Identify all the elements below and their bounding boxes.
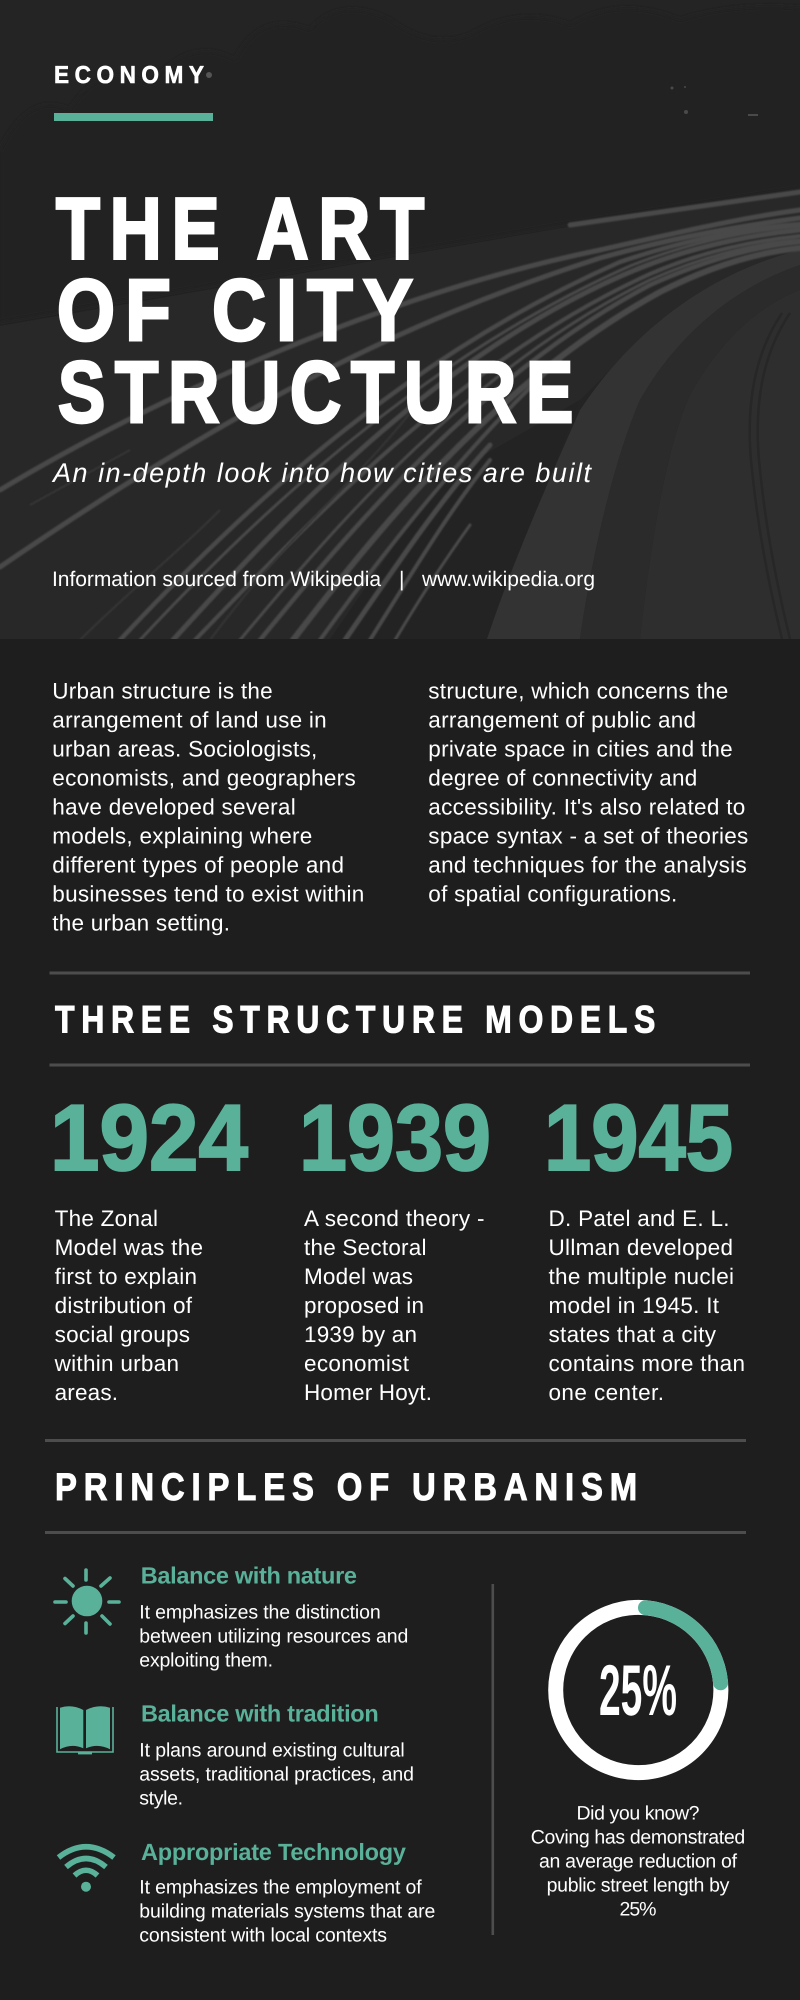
principle: appropriate technology: Appropriate Technology [141, 1839, 406, 1865]
source line: www.wikipedia.org [421, 568, 595, 591]
model 1924: within urban [54, 1351, 179, 1376]
model 1939: Homer Hoyt. [304, 1380, 432, 1405]
callout: did you know: 25% [620, 1898, 656, 1920]
model 1945: one center. [548, 1380, 664, 1405]
intro text: right column: arrangement of public and [428, 707, 696, 732]
model 1924: areas. [55, 1380, 118, 1405]
model 1945: the multiple nuclei [548, 1264, 734, 1289]
model 1945: Ullman developed [548, 1235, 733, 1260]
source line: | [399, 568, 404, 591]
model 1939: Model was [304, 1264, 413, 1289]
intro text: right column: space syntax - a set of theories [428, 823, 748, 848]
model 1939: 1939 [299, 1085, 491, 1190]
intro text: left column: urban areas. Sociologists, [52, 736, 317, 761]
intro text: right column: of spatial configurations. [428, 881, 677, 906]
heading: principles of urbanism: PRINCIPLES OF URBANISM [55, 1466, 644, 1509]
model 1939: proposed in [304, 1293, 424, 1318]
intro text: left column: economists, and geographers [52, 765, 356, 790]
intro text: right column [428, 678, 748, 906]
intro text: right column: degree of connectivity and [428, 765, 697, 790]
intro text: left column: the urban setting. [52, 910, 230, 935]
stat: 25 percent donut chart: 25% [599, 1651, 677, 1731]
model 1924: social groups [55, 1322, 190, 1347]
principle: balance with nature: exploiting them. [139, 1649, 273, 1671]
intro text: left column: models, explaining where [52, 823, 312, 848]
panel: hero header [0, 66, 800, 639]
model 1924: distribution of [55, 1293, 193, 1318]
icon: wifi [58, 1847, 114, 1892]
source line: Information sourced from Wikipedia [52, 568, 381, 591]
stat: 25 percent donut chart [556, 1607, 721, 1773]
model 1939 [299, 1085, 491, 1405]
hero background: night highway photo [0, 72, 800, 639]
model 1939: the Sectoral [304, 1235, 426, 1260]
source line [52, 568, 595, 591]
callout: did you know: an average reduction of [539, 1850, 738, 1872]
model 1924: 1924 [50, 1085, 248, 1190]
model 1945 [544, 1085, 745, 1405]
principle: balance with tradition [57, 1701, 414, 1810]
principle: balance with nature: between utilizing resources and [139, 1625, 408, 1647]
callout: did you know [531, 1802, 745, 1920]
intro text: right column: structure, which concerns the [428, 678, 728, 703]
model 1939: 1939 by an [304, 1322, 417, 1347]
principle: appropriate technology: consistent with local contexts [139, 1924, 387, 1946]
intro text: right column: accessibility. It's also related to [428, 794, 745, 819]
model 1924: The Zonal [55, 1206, 158, 1231]
model 1924 [50, 1085, 248, 1405]
model 1945: 1945 [544, 1085, 733, 1190]
model 1924: first to explain [55, 1264, 197, 1289]
section: three structure models [50, 972, 750, 1405]
model 1939: economist [304, 1351, 410, 1376]
intro text: left column: different types of people and [52, 852, 344, 877]
intro text: left column: have developed several [52, 794, 296, 819]
principle: balance with tradition: style. [139, 1788, 183, 1810]
callout: did you know: public street length by [547, 1874, 730, 1896]
title: STRUCTURE [58, 344, 583, 441]
model 1945: model in 1945. It [548, 1293, 720, 1318]
model 1945: D. Patel and E. L. [548, 1206, 730, 1231]
title: OF CITY [57, 262, 423, 359]
intro text: left column: Urban structure is the [52, 678, 273, 703]
icon: sun [55, 1570, 119, 1633]
principle: appropriate technology [58, 1839, 435, 1946]
model 1924: Model was the [55, 1235, 203, 1260]
title [56, 180, 583, 441]
model 1939: A second theory - [304, 1206, 484, 1231]
intro text: right column: and techniques for the analysis [428, 852, 747, 877]
section: principles of urbanism [45, 1439, 746, 1946]
heading: three structure models: THREE STRUCTURE MODELS [55, 998, 662, 1042]
principle: balance with tradition: Balance with tradition [141, 1701, 379, 1727]
intro text: right column: private space in cities and the [428, 736, 733, 761]
principle: appropriate technology: building materials systems that are [139, 1900, 435, 1922]
principle: balance with nature: It emphasizes the distinction [139, 1601, 381, 1623]
principle: appropriate technology: It emphasizes the employment of [139, 1876, 422, 1898]
icon: open book [57, 1706, 113, 1754]
intro text: left column: businesses tend to exist within [52, 881, 364, 906]
category label: ECONOMY [54, 62, 210, 89]
subtitle: An in-depth look into how cities are built [51, 458, 592, 488]
model 1945: contains more than [548, 1351, 745, 1376]
model 1945: states that a city [548, 1322, 717, 1347]
intro text: left column [52, 678, 364, 935]
principle: balance with nature [55, 1562, 408, 1671]
callout: did you know: Did you know? [576, 1802, 700, 1824]
callout: did you know: Coving has demonstrated [531, 1826, 745, 1848]
accent bar [54, 113, 213, 121]
principle: balance with nature: Balance with nature [141, 1562, 357, 1588]
principle: balance with tradition: assets, traditional practices, and [139, 1764, 414, 1786]
intro text: left column: arrangement of land use in [52, 707, 327, 732]
title: THE ART [56, 180, 434, 278]
principle: balance with tradition: It plans around existing cultural [139, 1740, 405, 1762]
